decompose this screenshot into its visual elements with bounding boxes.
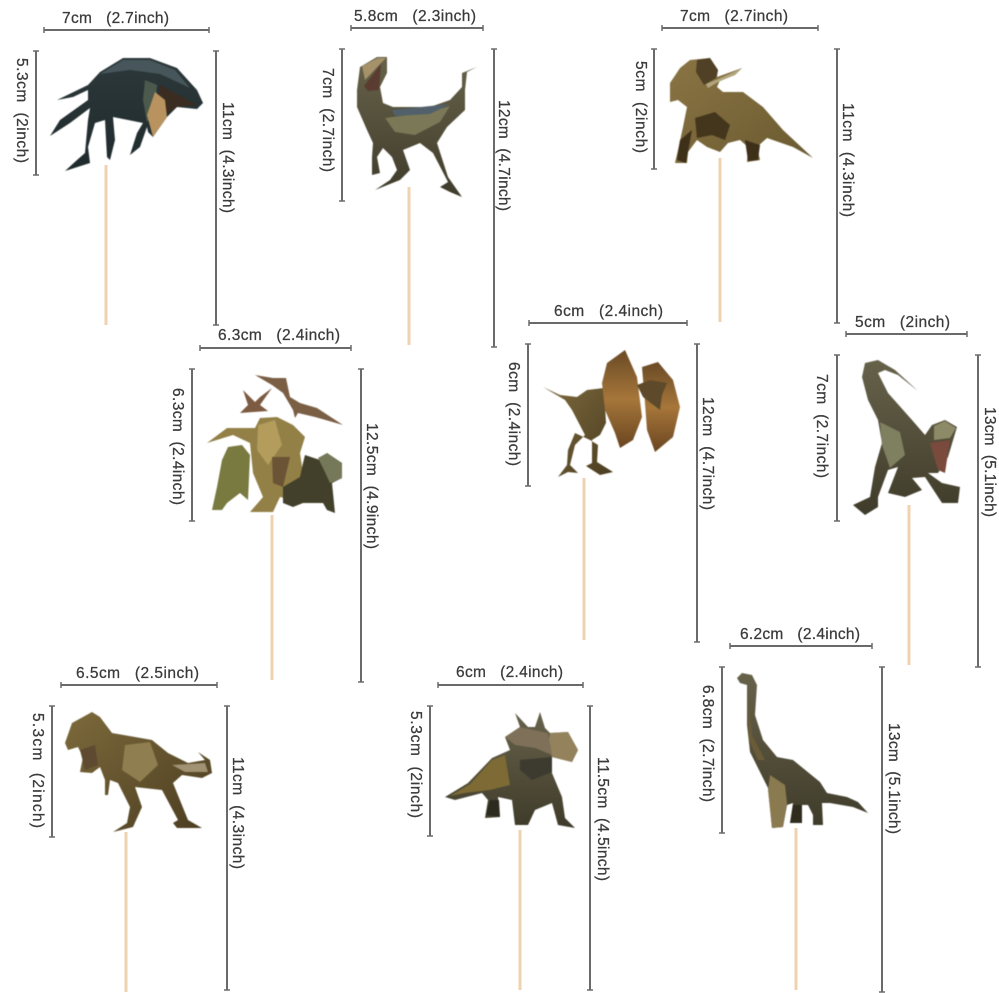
toothpick 5 [582, 478, 586, 640]
topper 8: triceratops side [407, 664, 611, 990]
total height dimension 4: 12.5cm (4.9inch) [363, 423, 380, 549]
topper 9: brachiosaurus [699, 626, 902, 992]
width dimension 7: 6.5cm (2.5inch) [76, 665, 199, 682]
icon: raptor [357, 57, 477, 197]
width dimension 1: 7cm (2.7inch) [62, 10, 169, 27]
total height dimension 3: 11cm (4.3inch) [839, 103, 856, 217]
width dimension 5: 6cm (2.4inch) [554, 303, 663, 320]
total height dimension 9: 13cm (5.1inch) [885, 723, 902, 834]
toothpick 9 [794, 828, 798, 990]
total height dimension 6: 13cm (5.1inch) [981, 407, 998, 517]
head height dimension 7 [29, 706, 55, 837]
width dimension 3: 7cm (2.7inch) [680, 8, 788, 25]
width dimension 9: 6.2cm (2.4inch) [740, 626, 860, 643]
icon: tyrannosaurus [65, 712, 212, 832]
icon: raptor walking [853, 360, 960, 515]
head height dimension 6: 7cm (2.7inch) [813, 374, 830, 478]
head height dimension 8: 5.3cm (2inch) [407, 711, 424, 818]
icon: triceratops side [445, 712, 578, 828]
topper 7: tyrannosaurus [29, 665, 246, 992]
head height dimension 5: 6cm (2.4inch) [505, 362, 522, 466]
toothpick 4 [270, 515, 274, 680]
width dimension 2: 5.8cm (2.3inch) [354, 8, 476, 25]
total height dimension 1: 11cm (4.3inch) [219, 102, 236, 213]
total height dimension 7: 11cm (4.3inch) [229, 757, 246, 869]
icon: mosasaurus [50, 58, 203, 171]
width dimension 4: 6.3cm (2.4inch) [218, 327, 340, 344]
head height dimension 3 [632, 49, 657, 169]
toothpick 2 [408, 187, 410, 345]
icon: triceratops [670, 58, 813, 163]
total height dimension 8: 11.5cm (4.5inch) [594, 757, 611, 881]
topper 1: mosasaurus [13, 10, 236, 325]
toothpick 7 [124, 832, 128, 992]
toothpick 8 [518, 830, 522, 990]
head height dimension 4: 6.3cm (2.4inch) [169, 388, 186, 505]
width dimension 6: 5cm (2inch) [855, 314, 950, 331]
icon: dinosaur group [207, 375, 343, 513]
head height dimension 9: 6.8cm (2.7inch) [699, 685, 716, 802]
head height dimension 8 [407, 706, 433, 836]
icon: brachiosaurus [737, 673, 868, 828]
head height dimension 7: 5.3cm (2inch) [29, 713, 46, 828]
topper 5: dilophosaurus [505, 303, 716, 642]
topper 4: dinosaur group [169, 327, 380, 682]
head height dimension 3: 5cm (2inch) [632, 61, 649, 153]
total height dimension 5: 12cm (4.7inch) [699, 397, 716, 510]
width dimension 2 [351, 8, 483, 31]
head height dimension 2: 7cm (2.7inch) [319, 68, 336, 172]
head height dimension 1 [13, 51, 39, 175]
total height dimension 2: 12cm (4.7inch) [495, 100, 512, 211]
toothpick 6 [908, 505, 910, 665]
width dimension 8: 6cm (2.4inch) [456, 664, 563, 681]
icon: dilophosaurus [543, 350, 680, 477]
topper 6: raptor walking [813, 314, 998, 667]
width dimension 6 [846, 314, 967, 337]
toothpick 1 [104, 165, 108, 325]
toothpick 3 [718, 158, 722, 322]
topper 3: triceratops [632, 8, 856, 323]
head height dimension 1: 5.3cm (2inch) [13, 58, 30, 163]
topper 2: raptor [319, 8, 512, 347]
